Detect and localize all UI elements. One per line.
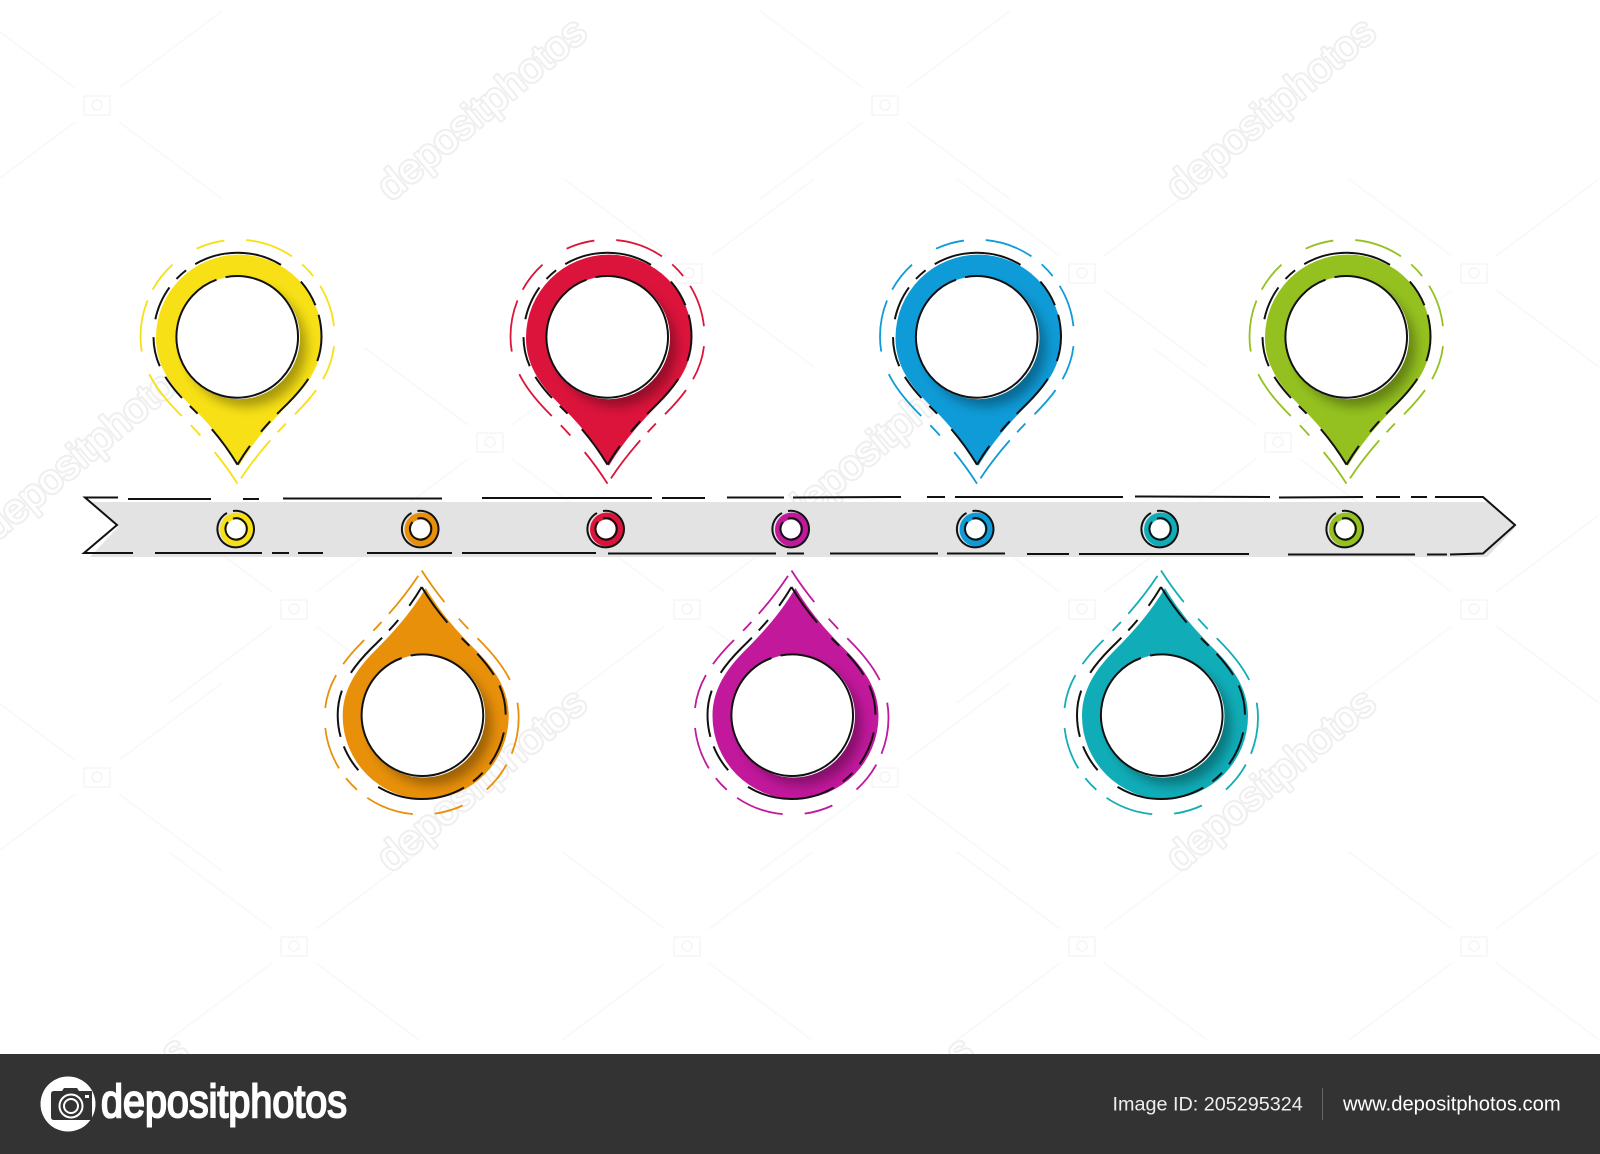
watermark background: depositphotos — [1158, 9, 1384, 209]
footer band — [0, 1054, 1600, 1154]
timeline marker: orange — [402, 511, 438, 547]
timeline marker: red — [587, 511, 624, 547]
logo wordmark: depositphotos — [101, 1075, 347, 1127]
website: www.depositphotos.com — [1342, 1094, 1561, 1116]
watermark background: tos — [912, 1028, 981, 1096]
bar fill — [90, 502, 1516, 557]
timeline marker: yellow — [217, 511, 254, 547]
pin: blue — [880, 240, 1074, 484]
pin: red — [510, 240, 704, 484]
timeline marker: green — [1326, 511, 1363, 547]
pin: magenta — [694, 570, 888, 815]
timeline arrow bar — [84, 496, 1516, 557]
pin: orange — [325, 570, 519, 815]
pin: green — [1250, 240, 1444, 484]
watermark background: depositphotos — [774, 335, 1000, 535]
timeline marker: magenta — [772, 511, 809, 547]
logo icon: camera — [40, 1076, 96, 1132]
watermark background: tos — [127, 1028, 196, 1096]
pin: yellow — [140, 240, 334, 484]
watermark background: depositphotos — [369, 9, 595, 209]
bar dashed outline — [84, 496, 1515, 554]
divider — [1322, 1088, 1323, 1120]
watermark background: depositphotos — [1158, 680, 1384, 880]
watermark background: depositphotos — [369, 680, 595, 880]
timeline marker: teal — [1141, 511, 1178, 547]
pin: teal — [1064, 570, 1258, 815]
image id: Image ID: 205295324 — [1112, 1094, 1303, 1116]
timeline marker: blue — [957, 511, 994, 547]
